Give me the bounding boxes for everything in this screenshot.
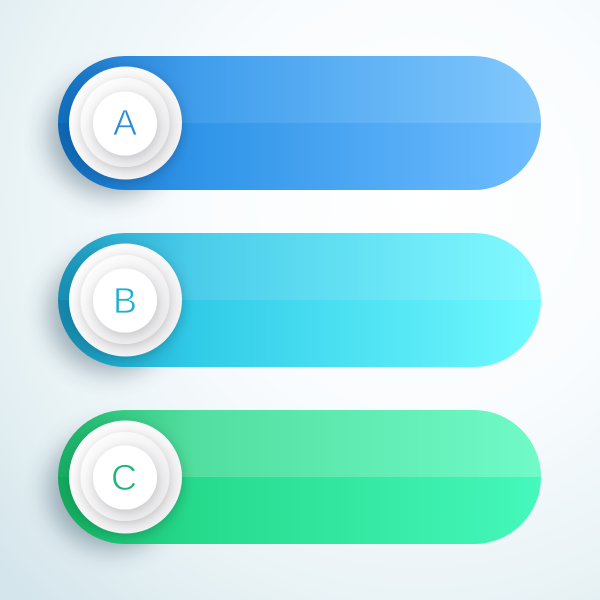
letter A: A bbox=[113, 102, 137, 143]
pill B bbox=[58, 233, 541, 367]
pill A bbox=[58, 56, 541, 190]
shadow C bbox=[48, 430, 176, 550]
badge C bbox=[69, 420, 182, 534]
letter B: B bbox=[113, 280, 137, 321]
shadow B bbox=[48, 253, 176, 373]
pill C bbox=[58, 410, 541, 544]
shadow A bbox=[48, 76, 176, 196]
banner A bbox=[48, 56, 541, 196]
banner C bbox=[48, 410, 541, 550]
letter C: C bbox=[111, 457, 137, 498]
badge A bbox=[69, 66, 182, 180]
badge B bbox=[69, 244, 182, 356]
banner B bbox=[48, 233, 541, 373]
